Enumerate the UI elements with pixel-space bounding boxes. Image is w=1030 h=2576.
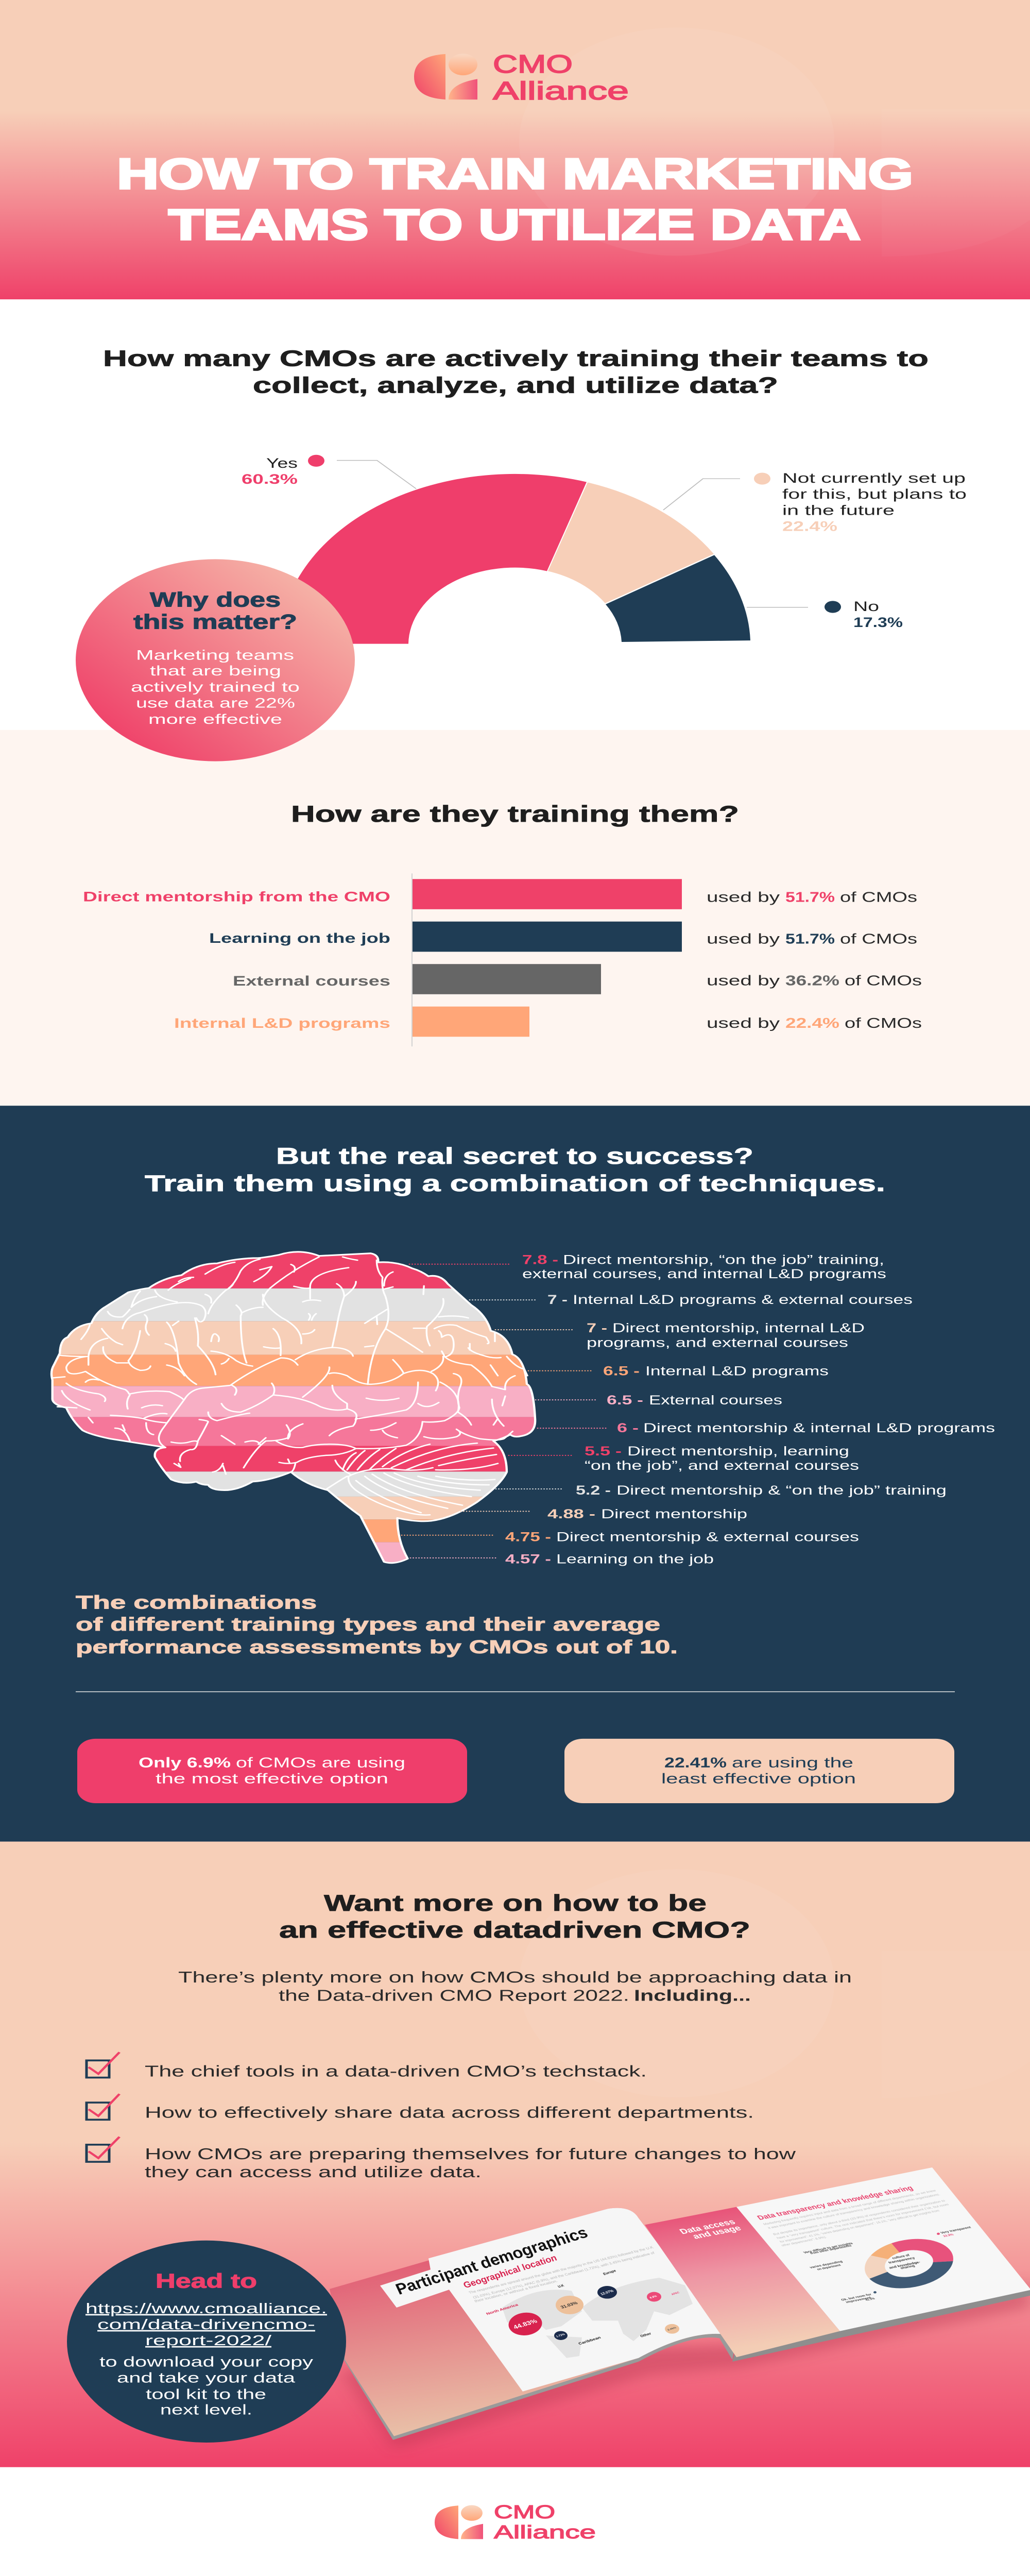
heading xyxy=(279,1890,750,1943)
callout: no xyxy=(747,599,903,630)
callout: least effective: 22.41% xyxy=(664,1755,727,1771)
text block: combinations caption: The combinations xyxy=(76,1592,317,1613)
bar: internal L&D: of CMOs xyxy=(845,1015,922,1031)
item 6.5 internal xyxy=(528,1364,829,1378)
heading: Want more on how to be xyxy=(324,1890,707,1916)
item 7.8: Direct mentorship, “on the job” training, xyxy=(563,1253,884,1267)
callout: most effective: of CMOs are using xyxy=(236,1755,405,1771)
heading: collect, analyze, and utilize data? xyxy=(253,374,778,398)
title xyxy=(117,150,913,249)
bubbles: 6.9% xyxy=(649,2295,658,2299)
report link: com/data-drivencmo- xyxy=(97,2317,315,2333)
callout: least effective xyxy=(564,1739,954,1803)
item 4.75: Direct mentorship & external courses xyxy=(556,1530,859,1544)
report link: https://www.cmoalliance. xyxy=(85,2301,327,2317)
bubble labels: APAC xyxy=(671,2291,680,2296)
item 6.5 internal: 6.5 - xyxy=(603,1364,640,1378)
item 4.88: Direct mentorship xyxy=(601,1507,747,1521)
body copy: it was important to examine the culture of transparency and knowledge sharing within organizations. xyxy=(767,2193,941,2230)
heading: How are they training them? xyxy=(291,801,739,827)
body copy: (31.03%), Europe (12.07%), APAC (6.9%), and the Caribbean (1.72%), with 3.45% being indicative of xyxy=(472,2251,656,2299)
callout: why does this matter: actively trained to xyxy=(131,679,300,694)
item 6.5 internal: Internal L&D programs xyxy=(645,1364,829,1378)
item 5.2 xyxy=(496,1483,947,1498)
callout: most effective: the most effective option xyxy=(156,1771,388,1787)
text block: combinations caption: performance assessments by CMOs out of 10. xyxy=(76,1637,678,1657)
bar: external courses: of CMOs xyxy=(845,973,922,989)
callout: why does this matter: Marketing teams xyxy=(136,648,294,663)
callout: no: 17.3% xyxy=(853,615,903,630)
callout: least effective: are using the xyxy=(732,1755,853,1771)
heading: But the real secret to success? xyxy=(276,1143,753,1169)
body copy: But despite its importance, only about a third (33.9%) of respondents considered their organization to xyxy=(772,2199,946,2236)
donut chart xyxy=(851,2228,967,2299)
right page: and usage xyxy=(691,2224,744,2241)
callout: why does this matter: more effective xyxy=(148,711,282,727)
item 7 internal and external: Internal L&D programs & external courses xyxy=(573,1293,913,1307)
intro text: Including... xyxy=(634,1987,751,2004)
bar: external courses xyxy=(233,964,922,994)
bubble labels: Caribbean xyxy=(577,2335,602,2346)
logo: footer: Alliance xyxy=(494,2522,596,2543)
item 1 xyxy=(87,2052,647,2080)
donut centre label: transparency xyxy=(887,2256,916,2264)
item 2: How to effectively share data across different departments. xyxy=(145,2104,754,2121)
item 4.88: 4.88 - xyxy=(547,1507,595,1521)
item 5.5 xyxy=(509,1444,859,1473)
bar: internal L&D: used by xyxy=(707,1015,780,1031)
bubble labels: U.K xyxy=(557,2283,565,2289)
donut labels: Very transparent xyxy=(939,2225,972,2234)
intro text xyxy=(178,1969,852,2004)
bubbles xyxy=(503,2286,679,2340)
heading: How many CMOs are actively training their teams to xyxy=(103,346,929,371)
semi-donut chart xyxy=(280,474,750,644)
heading xyxy=(145,1143,885,1196)
item 3: they can access and utilize data. xyxy=(145,2163,482,2180)
item 7 direct mentorship: programs, and external courses xyxy=(587,1336,848,1350)
callout: least effective: least effective option xyxy=(661,1771,856,1787)
body copy: Marketing frequently requires input and data from a broad range of different departments, so we knew xyxy=(762,2189,937,2226)
callout: most effective xyxy=(77,1739,467,1803)
callout: most effective: Only 6.9% xyxy=(139,1755,231,1771)
item 5.5: 5.5 - xyxy=(585,1444,622,1459)
callout: why does this matter: use data are 22% xyxy=(136,695,295,710)
bubbles: 12.07% xyxy=(599,2289,614,2296)
item 4.57: 4.57 - xyxy=(505,1552,551,1567)
item 7 internal and external: 7 - xyxy=(547,1293,568,1307)
item 3 xyxy=(87,2137,796,2180)
callout: not currently set up: 22.4% xyxy=(782,518,837,534)
bar: direct mentorship xyxy=(83,879,917,909)
item 7 direct mentorship: Direct mentorship, internal L&D xyxy=(612,1321,865,1335)
callout: head to xyxy=(67,2241,346,2443)
bar chart xyxy=(83,873,922,1046)
item 2 xyxy=(87,2094,754,2121)
item 7 direct mentorship: 7 - xyxy=(587,1321,607,1335)
bar: learning on the job xyxy=(209,922,917,952)
item 6.5 external xyxy=(536,1393,782,1408)
callout: no: No xyxy=(853,599,879,614)
logo: CMO Alliance: Alliance xyxy=(493,76,629,105)
heading: Train them using a combination of techniques. xyxy=(145,1171,885,1196)
right page: Data transparency and knowledge sharing xyxy=(756,2184,915,2222)
world map xyxy=(502,2278,693,2358)
item 7.8: 7.8 - xyxy=(522,1253,558,1267)
bubble labels xyxy=(485,2268,680,2346)
item 4.57: Learning on the job xyxy=(556,1552,714,1567)
left page: Geographical location xyxy=(461,2253,559,2290)
bar: learning on the job: of CMOs xyxy=(840,931,917,947)
item 6: Direct mentorship & internal L&D programs xyxy=(643,1421,995,1435)
donut centre label: culture of xyxy=(891,2253,911,2260)
donut labels: Very difficult to get insights xyxy=(802,2242,854,2254)
body copy: other departments”: 8.9%). xyxy=(780,2235,828,2247)
panel: header xyxy=(0,0,1030,299)
panel: combination of techniques xyxy=(0,1106,1030,1842)
callout: yes xyxy=(242,455,416,489)
panel: how are they training them xyxy=(0,730,1030,1106)
callout: why does this matter: that are being xyxy=(150,663,281,679)
item 6.5 external: External courses xyxy=(649,1393,782,1408)
item 7.8: external courses, and internal L&D programs xyxy=(522,1267,886,1281)
bar: learning on the job: Learning on the job xyxy=(209,930,390,946)
callout: head to: tool kit to the xyxy=(146,2386,266,2402)
callout: not currently set up: in the future xyxy=(782,502,895,518)
text block: combinations caption: of different training types and their average xyxy=(76,1614,660,1635)
callout: head to: next level. xyxy=(160,2402,252,2418)
panel: how many CMOs xyxy=(76,346,967,761)
bubbles: 31.03% xyxy=(560,2301,579,2310)
book mockup xyxy=(330,2167,1030,2449)
right page: Data access xyxy=(678,2218,737,2236)
item 6.5 external: 6.5 - xyxy=(607,1393,643,1408)
panel: want more xyxy=(0,1842,1030,2467)
bubble labels: Other xyxy=(639,2332,652,2338)
item 4.57 xyxy=(410,1552,714,1567)
item 7.8 xyxy=(409,1253,886,1281)
right page xyxy=(645,2167,1030,2362)
callout: head to: to download your copy xyxy=(99,2354,314,2370)
item 5.2: 5.2 - xyxy=(576,1483,611,1498)
donut labels xyxy=(802,2225,972,2304)
callout: why does this matter: this matter? xyxy=(133,611,297,634)
callout: not currently set up: Not currently set up xyxy=(782,470,966,486)
item 5.5: “on the job”, and external courses xyxy=(585,1459,859,1473)
logo: footer xyxy=(435,2502,596,2543)
bar: external courses: used by xyxy=(707,973,780,989)
callout: yes: Yes xyxy=(266,455,298,471)
body copy: for improvement”: 41.1%, “varies depending on department”: 16.1%, “very difficult to get insights from xyxy=(779,2209,940,2243)
intro text: the Data-driven CMO Report 2022. xyxy=(279,1987,629,2004)
donut labels: varies depending xyxy=(809,2260,844,2269)
callout: not currently set up: for this, but plans to xyxy=(782,486,967,502)
donut labels: from other departments xyxy=(809,2244,852,2255)
item 4.88 xyxy=(461,1507,747,1521)
logo: footer: CMO xyxy=(494,2502,555,2522)
bubbles: 1.72% xyxy=(555,2333,566,2338)
callout: yes: 60.3% xyxy=(242,471,298,487)
bar: external courses: External courses xyxy=(233,973,390,989)
page title: Participant demographics xyxy=(391,2224,592,2298)
item 7 direct mentorship xyxy=(495,1321,865,1350)
title: HOW TO TRAIN MARKETING xyxy=(117,150,913,198)
bar: internal L&D xyxy=(174,1007,922,1037)
legend: technique scores xyxy=(402,1253,995,1567)
item 3: How CMOs are preparing themselves for future changes to how xyxy=(145,2145,796,2163)
donut centre label xyxy=(887,2253,921,2270)
bar: direct mentorship: used by xyxy=(707,889,780,905)
donut labels: Ok, but room for xyxy=(840,2293,872,2301)
body copy: their location, or without a fixed location. xyxy=(473,2279,559,2303)
donut centre label: sharing xyxy=(899,2264,916,2270)
title: TEAMS TO UTILIZE DATA xyxy=(168,200,861,249)
item 4.75 xyxy=(402,1530,859,1544)
bar: internal L&D: Internal L&D programs xyxy=(174,1015,390,1031)
donut labels: on department xyxy=(816,2263,842,2271)
donut labels: improvement xyxy=(845,2296,872,2304)
item 1: The chief tools in a data-driven CMO’s techstack. xyxy=(145,2062,647,2080)
donut labels: 33.9% xyxy=(942,2233,955,2238)
checklist xyxy=(87,2052,796,2180)
bubble labels: North America xyxy=(485,2303,519,2316)
callout: why does this matter xyxy=(76,559,355,761)
bubbles: 3.45% xyxy=(667,2327,677,2331)
callout: not currently set up xyxy=(663,470,967,534)
bubbles: 44.83% xyxy=(512,2318,539,2330)
intro text: There’s plenty more on how CMOs should be approaching data in xyxy=(178,1969,852,1986)
body copy: The respondents are spread around the globe with the majority in the US (44.83%) followed by the U.K xyxy=(468,2245,655,2295)
report link: report-2022/ xyxy=(145,2333,272,2349)
bar: external courses: 36.2% xyxy=(785,973,839,989)
bar: direct mentorship: of CMOs xyxy=(840,889,917,905)
brain illustration xyxy=(48,1230,551,1566)
bar: direct mentorship: 51.7% xyxy=(785,889,835,905)
callout: head to: Head to xyxy=(156,2269,257,2292)
item 5.5: Direct mentorship, learning xyxy=(627,1444,849,1459)
text block: combinations caption xyxy=(76,1592,678,1657)
bar: learning on the job: 51.7% xyxy=(785,931,835,947)
heading xyxy=(103,346,929,398)
logo: CMO Alliance: CMO xyxy=(493,49,573,78)
donut centre label: and knowledge- xyxy=(888,2260,921,2269)
left page xyxy=(330,2208,736,2440)
item 4.75: 4.75 - xyxy=(505,1530,551,1544)
bubble labels: Europe xyxy=(602,2268,617,2276)
item 6: 6 - xyxy=(617,1421,639,1435)
bar: internal L&D: 22.4% xyxy=(785,1015,839,1031)
report link xyxy=(85,2301,327,2349)
heading: an effective datadriven CMO? xyxy=(279,1917,750,1943)
callout: why does this matter: Why does xyxy=(150,588,281,611)
donut labels: 41.1% xyxy=(864,2297,876,2301)
callout: head to: and take your data xyxy=(117,2370,296,2386)
body copy: have a “very transparent” culture. The rest indicated that there’s room for improvement (“ok, but room xyxy=(776,2202,950,2240)
body copy xyxy=(762,2189,950,2247)
bar: learning on the job: used by xyxy=(707,931,780,947)
logo: CMO Alliance xyxy=(414,49,629,105)
bar: direct mentorship: Direct mentorship from the CMO xyxy=(83,889,390,904)
item 5.2: Direct mentorship & “on the job” training xyxy=(616,1483,947,1498)
